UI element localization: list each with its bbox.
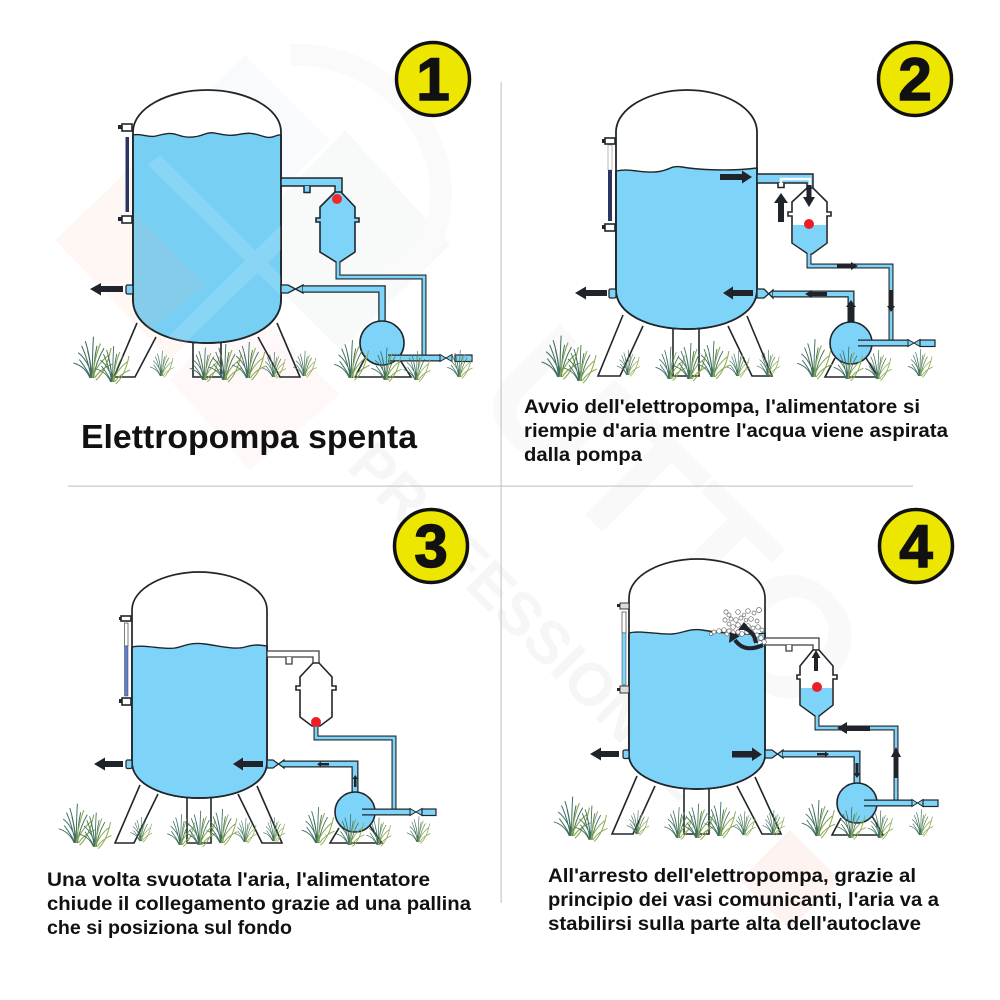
tank wall outline [132,646,267,798]
outlet stub [623,750,629,758]
grass [542,336,933,383]
delivery pipe [757,289,851,323]
tank wall outline [133,135,281,343]
caption 2 [524,397,948,466]
pump [825,322,878,377]
pipe vessel to inlet [316,727,394,810]
badge 4 [880,510,952,582]
caption 4 [548,866,939,935]
pump delivery pipe [281,285,382,323]
flow arrows [94,758,358,787]
badge 1: 1 [416,46,450,113]
upper pipe air [765,638,819,651]
feed vessel [788,188,831,254]
tank legs [598,315,772,376]
outlet stub [126,760,132,768]
panel 3: pallina chiude [59,572,436,849]
delivery pipe [267,760,355,793]
panel 4: arresto [554,559,938,842]
red ball [804,219,814,229]
grass [74,337,472,384]
divider: vertical [500,82,502,903]
feed vessel [296,663,336,726]
caption 1: Elettropompa spenta [81,418,418,455]
red ball [812,682,822,692]
water in vessel [793,225,826,253]
tank [133,90,281,343]
caption 4: principio dei vasi comunicanti, l'aria va a [548,890,939,911]
pump [832,783,883,835]
pipe vessel to inlet [338,260,424,358]
tank legs [114,323,300,377]
feed vessel [316,192,359,262]
suction pipe [361,808,436,816]
tank wall outline [616,168,757,329]
tank [132,572,267,798]
red ball [311,717,321,727]
badge 2 [878,42,952,116]
caption 2: riempie d'aria mentre l'acqua viene aspirata [524,421,948,442]
outlet stub [126,285,133,294]
water in tank [132,643,267,798]
flow arrows [590,650,901,778]
suction pipe [863,800,938,806]
delivery pipe [765,750,857,784]
tank [616,90,757,329]
water in tank [629,630,765,789]
badge 4: 4 [899,513,933,580]
level gauge [602,138,615,231]
tank legs [115,785,282,843]
divider: horizontal [68,486,913,487]
red ball [332,194,342,204]
caption 3 [47,870,471,939]
watermark tint over water [148,155,281,343]
caption 4: stabilirsi sulla parte alta dell'autoclave [548,914,921,935]
pipe vessel to inlet [809,253,891,343]
suction pipe [857,340,935,346]
upper pipe with air [757,174,813,190]
watermark tint lower left [134,212,205,330]
tank wall outline [629,633,765,789]
feed vessel [797,650,837,716]
tank legs [612,776,781,834]
caption 3: chiude il collegamento grazie ad una pallina [47,894,471,915]
air bubbles [709,608,766,645]
caption 2: dalla pompa [524,445,642,466]
water in tank [616,167,757,329]
badge 3: 3 [414,513,448,580]
badge 2: 2 [898,46,932,113]
flow arrows [575,170,895,322]
watermark logo: UTTO [444,292,903,751]
badge 1 [396,42,470,116]
grass [59,804,430,849]
pump [355,321,411,377]
water in tank [133,133,281,343]
outlet arrow [90,283,123,296]
caption 3: Una volta svuotata l'aria, l'alimentatore [47,870,430,891]
grass [554,797,933,842]
caption 3: che si posiziona sul fondo [47,918,292,939]
upper pipe empty [267,651,319,664]
upper pipe to vessel [281,178,342,195]
level gauge [118,124,132,223]
badge 3 [394,510,468,582]
caption 2: Avvio dell'elettropompa, l'alimentatore si [524,397,920,418]
panel 2: avvio [542,90,935,383]
outlet stub [609,289,616,298]
tank [629,559,765,789]
watermark logo: PROFESSIONAL [336,430,718,812]
level gauge [119,616,131,705]
pipe vessel to inlet [817,715,896,803]
pump [330,792,382,843]
curved air arrows [729,622,763,648]
suction pipe [387,354,472,362]
caption 4: All'arresto dell'elettropompa, grazie al [548,866,916,887]
panel 1: pompa spenta [74,90,472,384]
watermark logo [55,55,903,930]
level gauge [617,603,629,693]
water in vessel [801,688,832,715]
